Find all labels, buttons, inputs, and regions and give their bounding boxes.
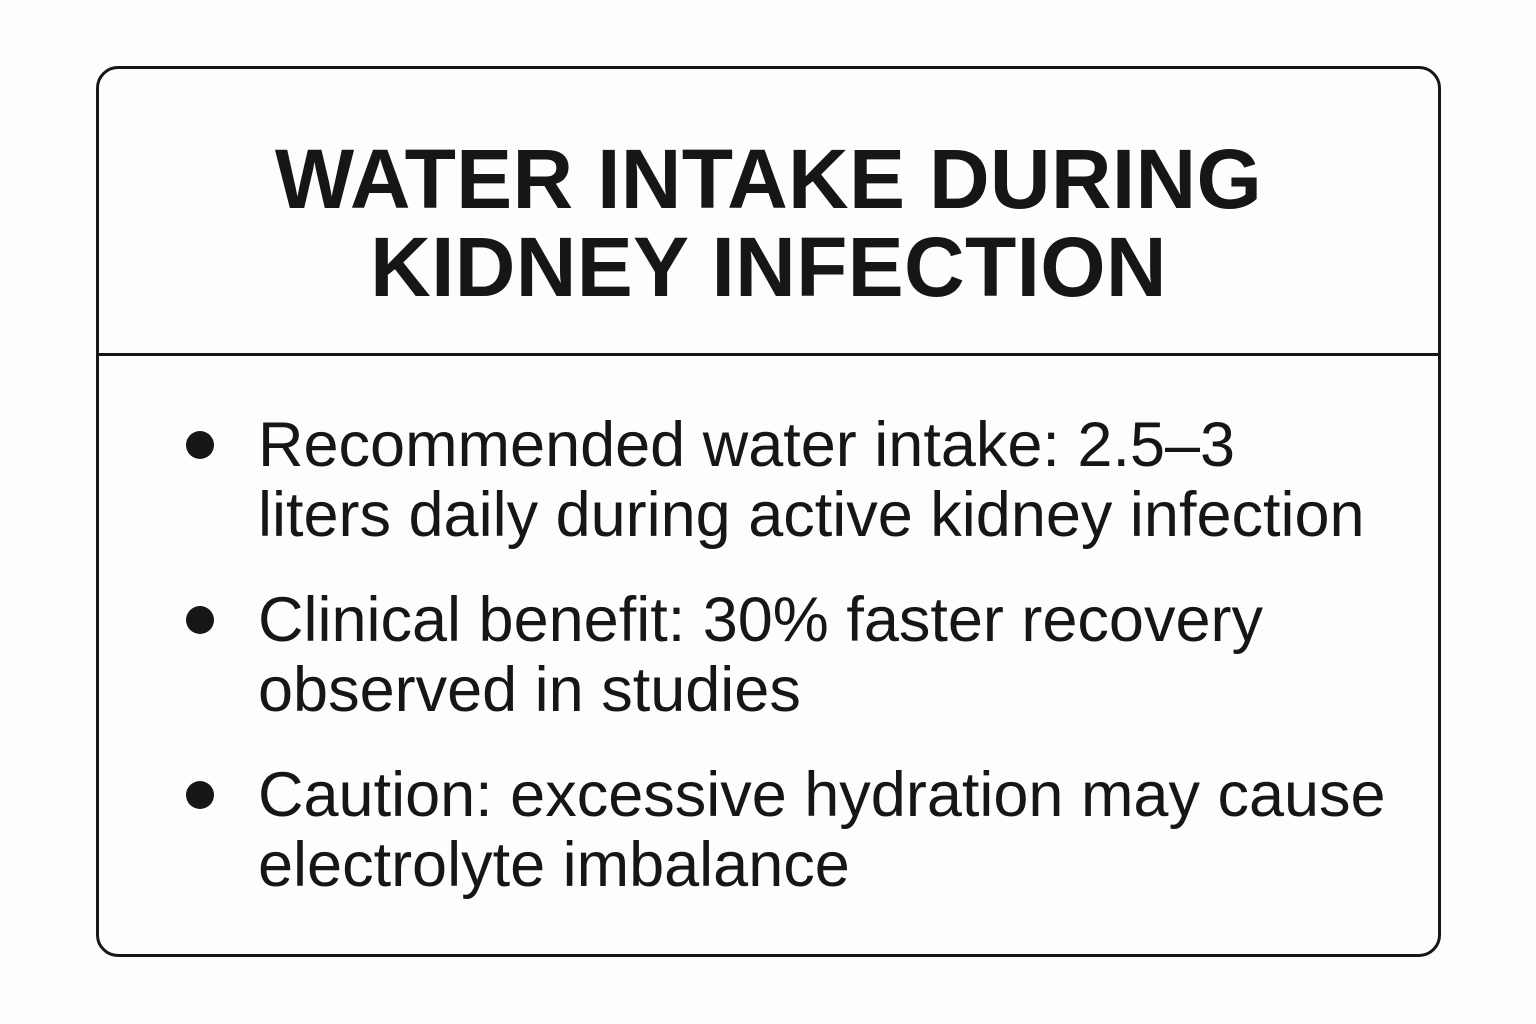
- text: clinical benefit: observed in studies: [258, 655, 801, 725]
- text: clinical benefit: Clinical benefit: 30% faster recovery: [258, 585, 1263, 655]
- card frame: [96, 66, 1441, 957]
- title: KIDNEY INFECTION: [370, 220, 1167, 314]
- title: [275, 132, 1262, 314]
- bullet 3: [186, 760, 1386, 900]
- text: recommended intake: [258, 410, 1365, 550]
- icon: bullet dot 2: [186, 606, 214, 634]
- bullet 2: [186, 585, 1263, 725]
- icon: bullet dot 1: [186, 431, 214, 459]
- bullet 1: [186, 410, 1365, 550]
- title: WATER INTAKE DURING: [275, 132, 1262, 226]
- icon: bullet dot 3: [186, 781, 214, 809]
- text: caution: [258, 760, 1386, 900]
- text: clinical benefit: [258, 585, 1263, 725]
- text: caution: electrolyte imbalance: [258, 830, 850, 900]
- text: recommended intake: liters daily during active kidney infection: [258, 480, 1365, 550]
- text: caution: Caution: excessive hydration may cause: [258, 760, 1386, 830]
- text: recommended intake: Recommended water intake: 2.5–3: [258, 410, 1235, 480]
